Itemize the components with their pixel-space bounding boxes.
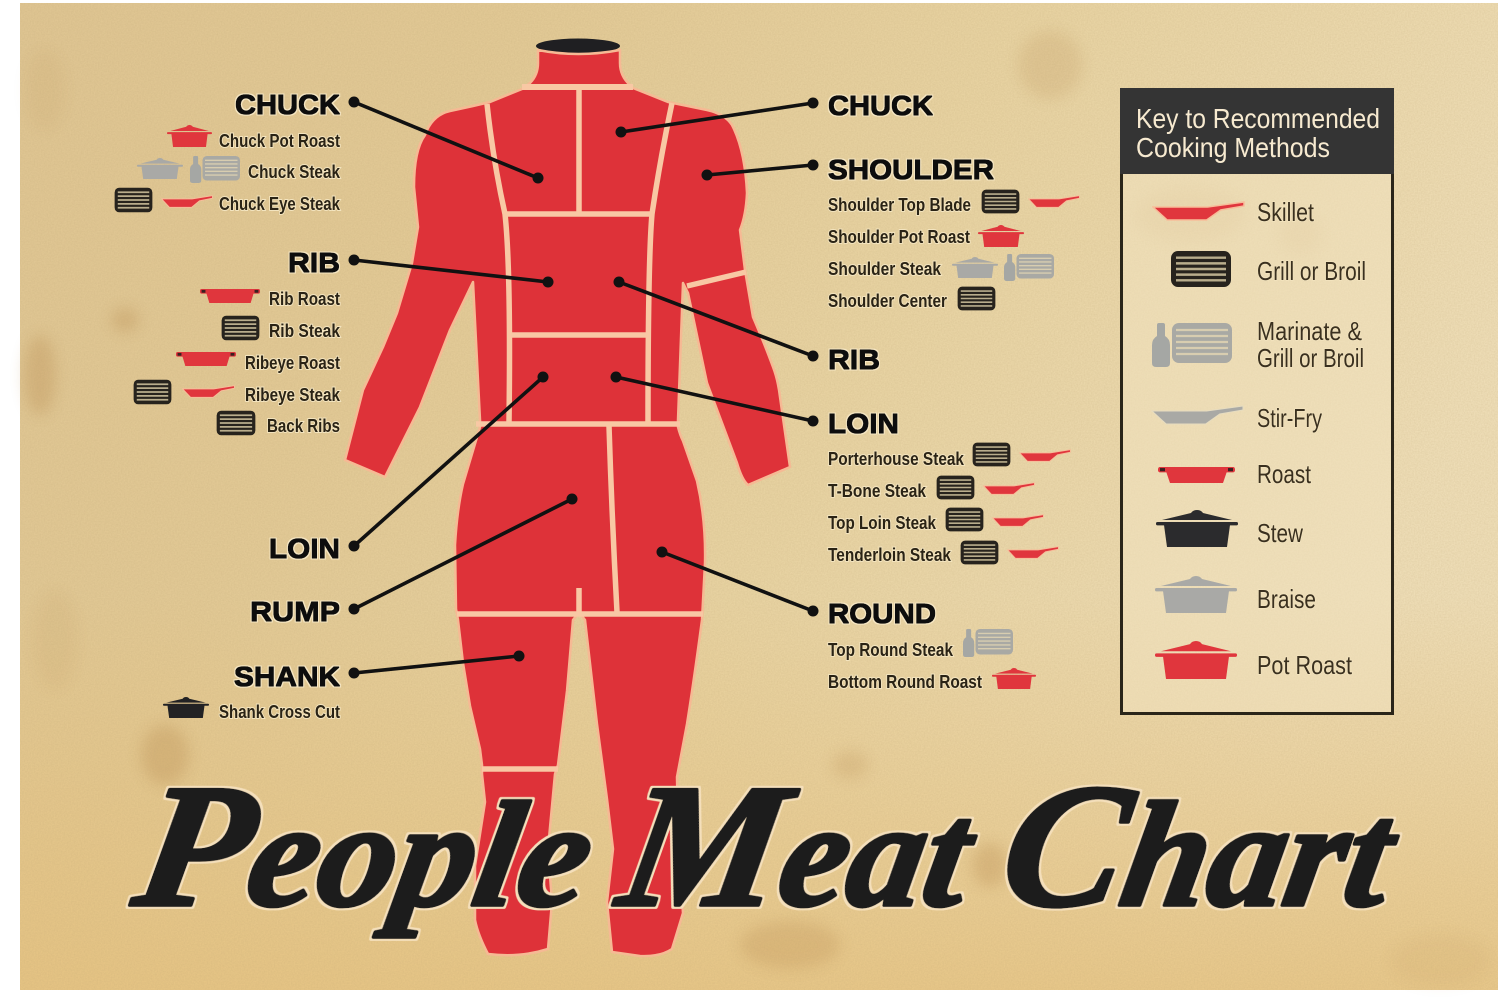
item: porterhouse steak: [828, 443, 1070, 469]
heading: chuck left: CHUCK: [235, 89, 340, 120]
key header: Key to Recommended: [1136, 103, 1380, 134]
key: skillet: Skillet: [1257, 197, 1315, 227]
item: top loin steak: [828, 508, 1043, 533]
leader: rump: [348, 494, 578, 614]
item: chuck pot roast: [167, 125, 340, 151]
item: shoulder top blade: Shoulder Top Blade: [828, 194, 971, 215]
body silhouette: torso and arms: [345, 50, 790, 956]
title: People Meat Chart: [122, 749, 1414, 944]
panel: key to recommended cooking methods: [1120, 88, 1394, 714]
key: stir-fry: [1152, 403, 1322, 433]
leader: right chuck: [616, 98, 818, 138]
item: chuck steak: Chuck Steak: [248, 161, 341, 182]
item: chuck pot roast: Chuck Pot Roast: [219, 130, 340, 151]
key header: [1120, 88, 1394, 174]
key: braise: [1155, 576, 1316, 614]
cut seams: [457, 87, 746, 769]
item: porterhouse steak: Porterhouse Steak: [828, 448, 965, 469]
key: grill or broil: [1171, 251, 1366, 287]
item: chuck eye steak: [115, 188, 341, 214]
key: stir-fry: Stir-Fry: [1257, 403, 1322, 433]
leader: shank: [348, 650, 524, 678]
key: pot roast: Pot Roast: [1257, 650, 1353, 680]
heading: loin left: LOIN: [269, 533, 340, 564]
key: marinate and grill or broil: Marinate &: [1257, 316, 1362, 346]
key: stew: Stew: [1257, 518, 1303, 548]
item: back ribs: Back Ribs: [267, 415, 340, 436]
item: shank cross cut: Shank Cross Cut: [219, 701, 340, 722]
title: People Meat Chart: People: [122, 749, 609, 944]
leader: shoulder: [702, 160, 818, 180]
leader: left rib: [348, 254, 554, 288]
key: roast: [1158, 459, 1312, 489]
key: braise: Braise: [1257, 584, 1316, 614]
item: ribeye roast: [176, 352, 340, 373]
heading: chuck right: CHUCK: [828, 90, 933, 121]
key: skillet: [1153, 197, 1315, 227]
item: rib roast: [200, 288, 340, 309]
leader: left chuck: [348, 96, 544, 184]
key: stew: [1156, 510, 1303, 548]
item: t-bone steak: [828, 476, 1034, 501]
key: marinate and grill or broil: Grill or Broil: [1257, 343, 1364, 373]
heading: rib left: RIB: [288, 247, 340, 278]
item: shoulder center: Shoulder Center: [828, 290, 947, 311]
key: marinate and grill or broil: [1152, 316, 1364, 373]
item: shank cross cut: [163, 697, 340, 722]
item: t-bone steak: T-Bone Steak: [828, 480, 927, 501]
item: top round steak: [828, 629, 1013, 660]
leader lines and dots: [348, 96, 818, 678]
key: roast: Roast: [1257, 459, 1312, 489]
leader: round: [656, 546, 818, 616]
item: top loin steak: Top Loin Steak: [828, 512, 937, 533]
title: People Meat Chart: Meat: [605, 749, 991, 944]
item: bottom round roast: Bottom Round Roast: [828, 671, 982, 692]
heading: shoulder: SHOULDER: [828, 154, 994, 185]
key frame: [1122, 90, 1392, 714]
item: shoulder steak: [828, 254, 1054, 281]
leader: right rib: [614, 276, 818, 362]
item: back ribs: [217, 411, 340, 436]
item: ribeye steak: [134, 380, 341, 405]
panel: right column cuts: [828, 90, 1079, 692]
item: rib steak: [222, 316, 341, 341]
figure: human body cut diagram: [345, 38, 790, 956]
item: ribeye roast: Ribeye Roast: [245, 352, 340, 373]
heading: rib right: RIB: [828, 344, 880, 375]
item: shoulder steak: Shoulder Steak: [828, 258, 942, 279]
item: chuck steak: [137, 156, 341, 183]
item: rib steak: Rib Steak: [269, 320, 341, 341]
item: top round steak: Top Round Steak: [828, 639, 954, 660]
heading: round: ROUND: [828, 598, 936, 629]
title: People Meat Chart: Chart: [989, 749, 1414, 944]
item: ribeye steak: Ribeye Steak: [245, 384, 341, 405]
neck opening: [536, 38, 620, 54]
item: tenderloin steak: [828, 541, 1058, 565]
heading: loin right: LOIN: [828, 408, 899, 439]
heading: shank: SHANK: [234, 661, 340, 692]
leader: left loin: [348, 372, 548, 552]
item: rib roast: Rib Roast: [269, 288, 340, 309]
key: grill or broil: Grill or Broil: [1257, 256, 1366, 286]
key: pot roast: [1155, 641, 1353, 680]
item: shoulder pot roast: Shoulder Pot Roast: [828, 226, 970, 247]
heading: rump: RUMP: [250, 596, 340, 627]
item: chuck eye steak: Chuck Eye Steak: [219, 193, 341, 214]
key header: Cooking Methods: [1136, 132, 1330, 163]
panel: left column cuts: [115, 89, 341, 722]
item: tenderloin steak: Tenderloin Steak: [828, 544, 952, 565]
leader: right loin: [610, 372, 818, 426]
item: shoulder top blade: [828, 190, 1079, 215]
